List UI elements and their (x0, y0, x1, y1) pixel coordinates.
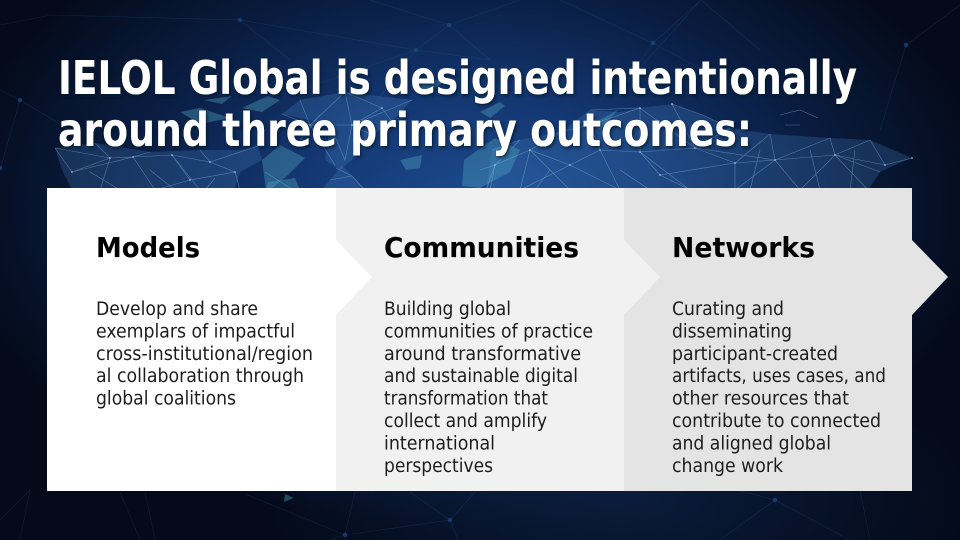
panel: communities (336, 188, 660, 491)
network nodes (72, 104, 912, 180)
networks body text: disseminating (672, 321, 792, 342)
teal map islands (180, 78, 618, 502)
panel: models (47, 188, 372, 491)
networks body text: other resources that (672, 389, 849, 410)
communities body text (384, 299, 593, 477)
communities body text: Building global (384, 299, 511, 320)
communities body text: international (384, 433, 495, 454)
communities body text: around transformative (384, 344, 581, 365)
models arrow panel (47, 188, 372, 491)
models body text: cross-institutional/region (96, 344, 313, 365)
models heading: Models (96, 232, 200, 264)
communities body text: collect and amplify (384, 411, 547, 432)
networks body text: Curating and (672, 299, 784, 320)
networks arrow panel (624, 188, 948, 491)
networks body text: participant-created (672, 344, 838, 365)
title line 2: around three primary outcomes: (58, 103, 752, 157)
panel: networks (624, 188, 948, 491)
models body text: al collaboration through (96, 366, 304, 387)
map landmasses (55, 92, 912, 190)
models body text: Develop and share (96, 299, 258, 320)
networks heading: Networks (672, 232, 815, 264)
title (58, 51, 857, 157)
networks body text: and aligned global (672, 433, 831, 454)
networks body text: artifacts, uses cases, and (672, 366, 886, 387)
communities heading: Communities (384, 232, 579, 264)
map mesh lines (55, 92, 912, 190)
models body text: exemplars of impactful (96, 321, 295, 342)
communities body text: communities of practice (384, 321, 593, 342)
communities body text: perspectives (384, 456, 493, 477)
models body text: global coalitions (96, 389, 236, 410)
networks body text: contribute to connected (672, 411, 881, 432)
networks body text (672, 299, 886, 477)
communities arrow panel (336, 188, 660, 491)
networks body text: change work (672, 456, 783, 477)
communities body text: transformation that (384, 389, 548, 410)
communities body text: and sustainable digital (384, 366, 578, 387)
models body text (96, 299, 313, 410)
